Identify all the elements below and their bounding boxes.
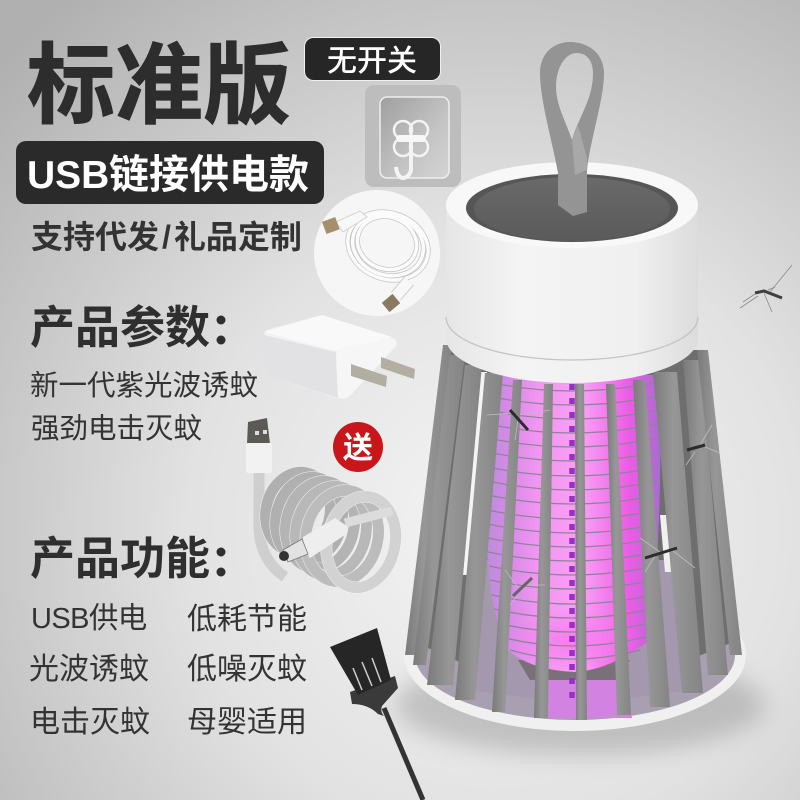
icon: mosquitoes on lamp xyxy=(487,410,720,605)
icon: coiled USB DC cable xyxy=(246,418,404,594)
heading: product parameters: 产品参数 xyxy=(30,302,210,353)
lamp: strap inner fold xyxy=(572,125,587,175)
lamp: inner floor xyxy=(415,590,735,720)
lamp: lower cavity xyxy=(470,560,690,705)
lamp: central dashed wire xyxy=(569,384,575,702)
text: mother and baby: 母婴适用 xyxy=(187,706,307,739)
badge: USB power model xyxy=(16,141,324,204)
title: 标准版 xyxy=(27,36,291,135)
lamp: hot lower glow xyxy=(507,608,643,672)
shadow under lamp xyxy=(395,655,765,755)
lamp: dark top disk xyxy=(466,174,678,242)
badge: USB power model: 链接供电款 xyxy=(109,153,309,197)
lamp: cap top face xyxy=(446,162,698,248)
icon: USB extension cable xyxy=(314,190,440,316)
icon: cleaning brush xyxy=(330,628,423,800)
text: electric shock: 电击灭蚊 xyxy=(30,706,150,739)
lamp: inner disk xyxy=(474,177,670,241)
text: light attract: 光波诱蚊 xyxy=(29,653,149,686)
icon: power adapter xyxy=(264,315,415,399)
text: low noise: 低噪灭蚊 xyxy=(187,653,307,686)
lamp: coil lines xyxy=(488,382,658,659)
badge: no switch: 无开关 xyxy=(327,45,417,78)
badge: no switch xyxy=(304,38,440,80)
lamp: cage ribs xyxy=(405,345,742,720)
illustration: mosquito lamp xyxy=(404,42,746,731)
lamp: white gap left xyxy=(463,372,487,575)
badge: USB power model: USB xyxy=(27,154,109,197)
lamp: tube base ring xyxy=(518,660,630,680)
icon: mosquito flying xyxy=(740,265,792,312)
heading: product functions: 产品功能 xyxy=(30,533,210,584)
lamp: glowing tube xyxy=(486,375,660,672)
text: parameter line one: 新一代紫光波诱蚊 xyxy=(30,370,258,402)
lamp: base xyxy=(404,579,746,731)
text: dropship and gifts: 支持代发/礼品定制 xyxy=(31,219,302,255)
icon: gift badge: 送 xyxy=(343,432,373,465)
lamp: violet floor glow xyxy=(535,670,632,718)
text: parameter line two: 强劲电击灭蚊 xyxy=(31,413,202,445)
lamp: inner cavity xyxy=(410,350,738,680)
text: USB power: USB供电 xyxy=(31,602,147,635)
lamp: cap seam xyxy=(446,317,698,360)
text: low power: 低耗节能 xyxy=(187,603,307,636)
lamp: white gap right xyxy=(660,515,672,572)
icon: gift badge xyxy=(333,422,383,472)
icon: adhesive hook xyxy=(365,85,461,187)
lamp: cap cylinder xyxy=(446,205,698,383)
lamp: hanging loop xyxy=(540,42,604,216)
